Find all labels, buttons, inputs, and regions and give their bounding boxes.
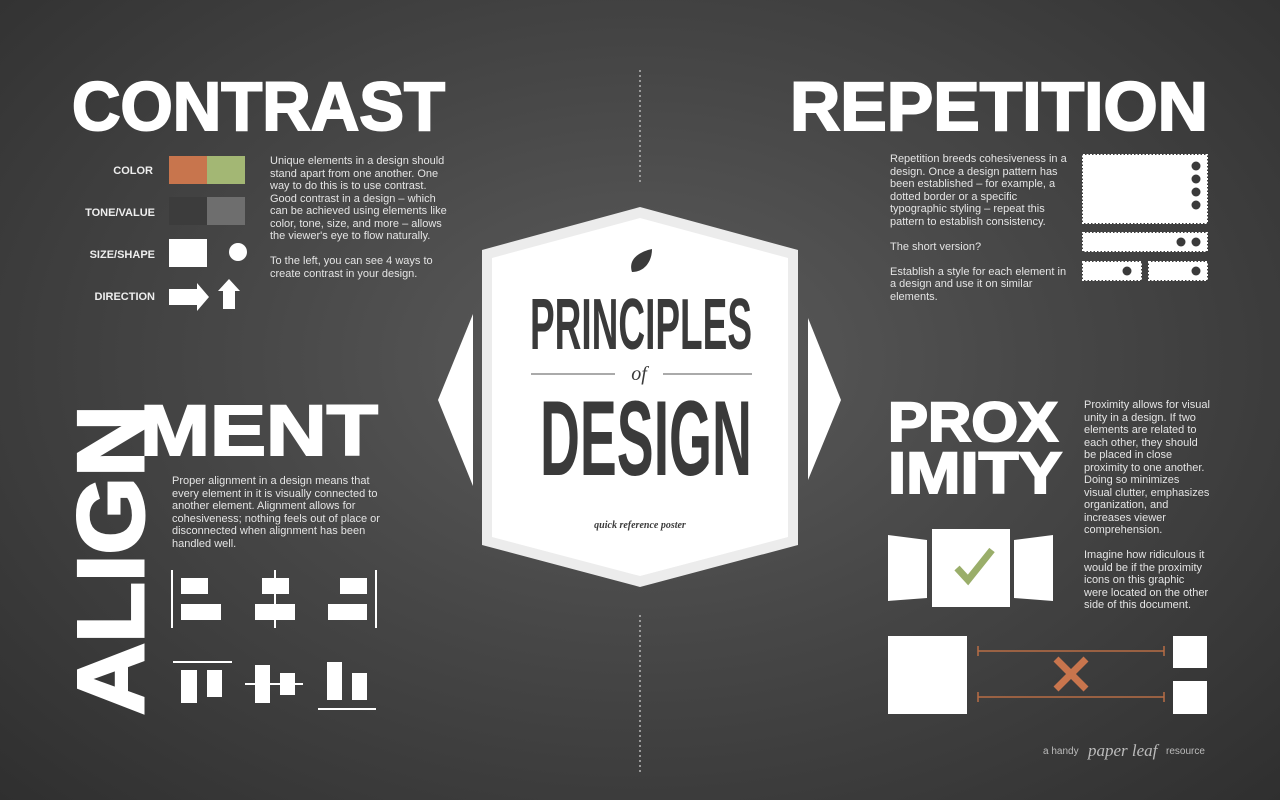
title: alignment MENT: MENT [140, 392, 378, 471]
text: alignment: Proper alignment in a design means that every element in it is visually connected to another element. Alignment allows for cohesiveness; nothing feels out of place or disconnected when alignment has been handled well. [172, 475, 380, 550]
text: repetition: Establish a style for each element in a design and use it on similar elements. [890, 266, 1066, 302]
text: repetition: The short version? [890, 240, 981, 252]
dotted center line bottom [639, 615, 641, 775]
footer credit [1043, 741, 1205, 760]
center badge hexagon: DESIGN [540, 378, 752, 498]
contrast labels: COLOR [113, 165, 153, 177]
title: contrast: CONTRAST [72, 68, 445, 145]
icon: leaf [631, 249, 652, 272]
footer credit: a handy [1043, 746, 1079, 757]
text: proximity: Proximity allows for visual unity in a design. If two elements are related to each other, they should be placed in close proximity to one another. Doing so minimizes visual clutter, emphasizes organization, and increases viewer comprehension. [1084, 399, 1210, 536]
title: proximity: IMITY [888, 441, 1062, 506]
text: contrast: To the left, you can see 4 ways to create contrast in your design. [270, 255, 433, 280]
contrast swatches [169, 156, 247, 311]
center badge side triangles [438, 314, 841, 486]
repetition icons [1083, 155, 1207, 280]
dotted center line top [639, 70, 641, 185]
text: repetition: Repetition breeds cohesiveness in a design. Once a design pattern has been established – for example, a dotted border or a specific typographic styling – repeat this pattern to establish consistency. [890, 153, 1067, 228]
contrast labels: SIZE/SHAPE [90, 249, 155, 261]
text: proximity: Imagine how ridiculous it would be if the proximity icons on this graphic were located on the other side of this document. [1084, 549, 1208, 611]
title: repetition: REPETITION [790, 68, 1208, 145]
center badge hexagon [482, 207, 798, 587]
footer credit: paper leaf [1087, 741, 1160, 760]
center badge hexagon: of [631, 363, 649, 385]
text: proximity [1084, 399, 1210, 611]
contrast labels: TONE/VALUE [85, 207, 155, 219]
contrast labels: DIRECTION [94, 291, 155, 303]
footer credit: resource [1166, 746, 1205, 757]
contrast labels [85, 165, 155, 303]
title: proximity [888, 390, 1062, 506]
alignment icons [172, 570, 376, 709]
proximity icons bad [888, 636, 1207, 714]
center badge hexagon: quick reference poster [594, 520, 686, 531]
proximity icons good [888, 529, 1053, 607]
text: contrast [270, 155, 447, 280]
text: repetition [890, 153, 1067, 302]
title: proximity: PROX [888, 390, 1058, 453]
badge title: PRINCIPLES [530, 285, 752, 365]
text: contrast: Unique elements in a design should stand apart from one another. One way to do this is to use contrast. Good contrast in a design – which can be achieved using elements like color, tone, size, and more – allows the viewer's eye to flow naturally. [270, 155, 447, 242]
title: alignment ALIGN vertical: ALIGN [58, 405, 163, 715]
